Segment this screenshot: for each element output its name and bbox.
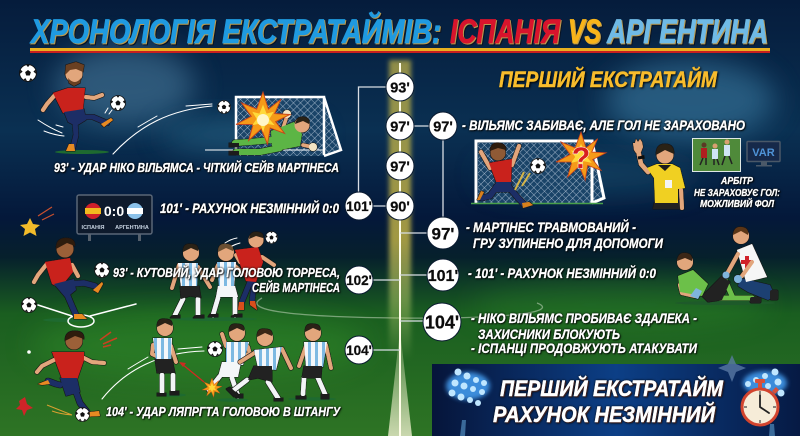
banner text: РАХУНОК НЕЗМІННИЙ bbox=[493, 401, 716, 427]
VAR monitor: VAR bbox=[752, 147, 775, 159]
connector lines bbox=[358, 87, 443, 350]
scoreboard: 0:0 bbox=[104, 203, 124, 219]
icon: sparkle bbox=[718, 355, 746, 382]
right event captions: - НІКО ВІЛЬЯМС ПРОБИВАЄ ЗДАЛЕКА - bbox=[471, 311, 697, 326]
timeline nodes: 101' bbox=[346, 199, 372, 214]
left event captions: 93' - УДАР НІКО ВІЛЬЯМСА - ЧІТКИЙ СЕЙВ МАРТІНЕСА bbox=[54, 159, 339, 175]
left event captions: 101' - РАХУНОК НЕЗМІННИЙ 0:0 bbox=[160, 200, 339, 216]
VAR monitor bbox=[747, 142, 780, 166]
referee caption: МОЖЛИВИЙ ФОЛ bbox=[700, 197, 775, 210]
timeline nodes: 101' bbox=[428, 268, 458, 285]
illustration: Williams shot bbox=[20, 62, 126, 154]
right event captions: ЗАХИСНИКИ БЛОКУЮТЬ bbox=[478, 327, 620, 342]
summary banner bbox=[432, 355, 800, 436]
lower left event captions: 104' - УДАР ЛЯПРГТА ГОЛОВОЮ В ШТАНГУ bbox=[106, 404, 341, 419]
lower left event captions: СЕЙВ МАРТІНЕСА bbox=[252, 279, 340, 295]
illustration: shot trajectory bbox=[113, 104, 212, 154]
timeline nodes: 90' bbox=[390, 200, 410, 216]
banner text: ПЕРШИЙ ЕКСТРАТАЙМ bbox=[500, 375, 724, 401]
timeline nodes: 93' bbox=[390, 80, 410, 96]
title: VS bbox=[568, 13, 601, 51]
right event captions: - МАРТІНЕС ТРАВМОВАНИЙ - bbox=[466, 219, 636, 235]
timeline nodes: 97' bbox=[432, 224, 454, 244]
timeline nodes: 97' bbox=[390, 120, 410, 136]
illustration: corner kick player bbox=[21, 238, 136, 327]
timeline nodes: 102' bbox=[346, 273, 372, 288]
illustration: referee bbox=[633, 139, 685, 209]
banner text bbox=[493, 375, 724, 427]
timeline nodes bbox=[345, 73, 461, 364]
icon: gold star with comet trail bbox=[20, 207, 54, 236]
scoreboard bbox=[77, 195, 152, 241]
referee caption: НЕ ЗАРАХОВУЄ ГОЛ: bbox=[694, 188, 780, 199]
central timeline line bbox=[388, 60, 412, 436]
illustration: Spanish striker shooting bbox=[16, 331, 117, 422]
scoreboard: АРГЕНТИНА bbox=[115, 225, 149, 231]
title: ХРОНОЛОГІЯ ЕКСТРАТАЙМІВ: bbox=[29, 12, 441, 51]
right event captions: ГРУ ЗУПИНЕНО ДЛЯ ДОПОМОГИ bbox=[473, 236, 663, 251]
title underline bbox=[30, 48, 770, 53]
referee caption: АРБІТР bbox=[720, 176, 753, 187]
icon: floodlight left bbox=[446, 368, 490, 436]
title bbox=[29, 12, 768, 51]
icon: stopwatch bbox=[742, 379, 779, 425]
right event captions: - 101' - РАХУНОК НЕЗМІННИЙ 0:0 bbox=[468, 265, 656, 281]
illustration: defenders and Torres header bbox=[170, 231, 278, 321]
scoreboard: ІСПАНІЯ bbox=[82, 225, 104, 231]
right event captions: - ІСПАНЦІ ПРОДОВЖУЮТЬ АТАКУВАТИ bbox=[471, 341, 697, 356]
illustration: goal and Martinez save bbox=[205, 92, 341, 156]
icon: floodlight right bbox=[743, 368, 787, 436]
timeline nodes: 97' bbox=[390, 160, 410, 176]
referee caption bbox=[694, 176, 780, 210]
timeline nodes: 104' bbox=[425, 312, 459, 332]
illustration: disallowed goal bbox=[471, 132, 606, 208]
title: ІСПАНІЯ bbox=[450, 13, 561, 51]
right event captions bbox=[462, 118, 745, 356]
illustration: blocked shot defenders bbox=[102, 319, 336, 402]
extra time heading: ПЕРШИЙ ЕКСТРАТАЙМ bbox=[499, 66, 718, 92]
timeline nodes: 97' bbox=[433, 120, 453, 136]
lower left event captions bbox=[106, 264, 341, 419]
lower left event captions: 93' - КУТОВИЙ, УДАР ГОЛОВОЮ ТОРРЕСА, bbox=[113, 264, 340, 280]
VAR replay image bbox=[692, 138, 740, 172]
right event captions: - ВІЛЬЯМС ЗАБИВАЄ, АЛЕ ГОЛ НЕ ЗАРАХОВАНО bbox=[462, 118, 745, 133]
illustration: disallowed goal: ? bbox=[572, 142, 590, 175]
illustration: injured goalkeeper and medic bbox=[675, 227, 778, 305]
left event captions bbox=[54, 159, 339, 216]
timeline nodes: 104' bbox=[346, 343, 372, 358]
